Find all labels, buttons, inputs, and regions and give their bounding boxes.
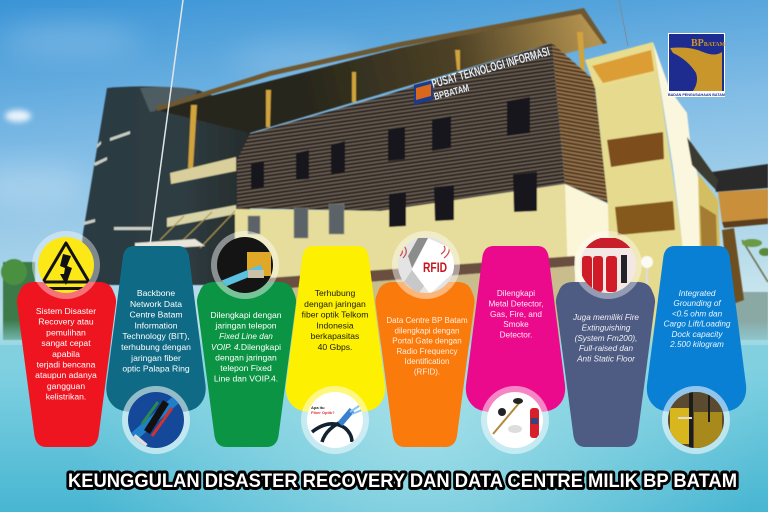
icon: fiber optic: Fiber Optik? <box>311 410 335 415</box>
logo: BP Batam <box>668 33 726 97</box>
clouds <box>0 24 370 205</box>
icon: high voltage <box>32 231 100 299</box>
text: Dock capacity <box>672 330 723 339</box>
text: ataupun adanya <box>35 370 97 380</box>
text: Smoke <box>503 320 529 329</box>
text: Full-raised dan <box>579 344 634 353</box>
text: Recovery atau <box>38 317 94 327</box>
text: Data Centre BP Batam <box>386 316 468 325</box>
text: terhubung dengan <box>121 342 191 352</box>
icon: cargo lift <box>662 386 730 454</box>
text: Portal Gate dengan <box>392 337 462 346</box>
text: Information <box>134 320 178 330</box>
text: VOIP. 4.Dilengkapi <box>211 342 281 352</box>
text: apabila <box>52 349 80 359</box>
louvre facade <box>237 43 565 211</box>
icon: fiber cables <box>122 386 190 454</box>
dark tower <box>78 86 250 285</box>
antennas <box>150 0 628 245</box>
text: Anti Static Floor <box>576 355 635 364</box>
text: Metal Detector, <box>488 299 544 308</box>
roof edge <box>155 8 607 111</box>
light pole <box>641 256 653 268</box>
text: Dilengkapi dengan <box>210 310 282 320</box>
louvre side <box>552 43 608 203</box>
icon: RFID cube: RFID <box>423 259 447 275</box>
text: Dilengkapi <box>497 289 535 298</box>
sign: Pusat Teknologi Informasi: PUSAT TEKNOLOGI INFORMASI <box>430 44 551 91</box>
text: Gas, Fire, and <box>490 310 542 319</box>
text: dilengkapi dengan <box>395 326 459 335</box>
icon: network cable <box>211 231 279 299</box>
text: Extinguishing <box>582 323 631 332</box>
text: Network Data <box>130 299 182 309</box>
icon: fire cylinders <box>574 231 642 299</box>
building <box>78 8 768 345</box>
text: terjadi bencana <box>37 360 96 370</box>
text: Terhubung <box>315 288 356 298</box>
balconies <box>170 157 236 184</box>
roof soffit <box>155 10 607 133</box>
panel: teal backbone network <box>106 246 206 454</box>
background sky <box>0 0 768 345</box>
text: jaringan fiber <box>130 353 181 363</box>
text: Identification <box>405 357 449 366</box>
text: (RFID). <box>414 368 440 376</box>
panel: orange RFID <box>375 231 475 447</box>
logo: BP Batam: BPBATAM <box>691 38 726 49</box>
text: sangat cepat <box>41 338 91 348</box>
text: fiber optik Telkom <box>302 310 368 320</box>
walkway <box>712 164 768 192</box>
stair tower <box>595 73 685 345</box>
background trees <box>1 239 768 340</box>
bright end wall <box>565 184 612 345</box>
text: Fixed Line dan <box>219 332 273 341</box>
title: KEUNGGULAN DISASTER RECOVERY DAN DATA CENTRE MILIK BP BATAM <box>68 470 737 492</box>
panel: yellow fiber optic <box>286 246 385 454</box>
lower windows <box>248 204 344 238</box>
ground floor band <box>240 256 575 292</box>
icon: fiber optic <box>301 386 369 454</box>
text: Backbone <box>137 288 175 298</box>
icon: fiber optic: Apa itu <box>311 405 325 410</box>
icon: RFID cube <box>392 231 460 299</box>
text: Radio Frequency <box>397 347 457 356</box>
text: pemulihan <box>46 327 86 337</box>
panel: red disaster recovery <box>17 231 116 447</box>
sign: Pusat Teknologi Informasi: BPBATAM <box>433 83 471 103</box>
text: berkapasitas <box>311 331 359 341</box>
text: Juga memiliki Fire <box>572 313 639 322</box>
text: jaringan telepon <box>214 321 277 331</box>
text: Integrated <box>679 289 716 298</box>
text: (System Fm200), <box>575 334 637 343</box>
cream wall <box>235 184 572 345</box>
text: <0.5 ohm dan <box>672 309 723 318</box>
text: optic Palapa Ring <box>122 364 190 374</box>
text: Indonesia <box>316 320 354 330</box>
facade windows <box>251 97 537 227</box>
text: dengan jaringan <box>215 352 277 362</box>
text: gangguan <box>47 381 85 391</box>
text: dengan jaringan <box>304 299 366 309</box>
text: 40 Gbps. <box>318 342 352 352</box>
text: Detector. <box>500 331 532 340</box>
bottom teal background <box>0 320 768 512</box>
text: 2.500 kilogram <box>669 340 724 349</box>
text: Technology (BIT), <box>122 331 190 341</box>
roof columns <box>188 105 197 168</box>
text: telepon Fixed <box>220 363 272 373</box>
panel: green telephone network <box>197 231 296 447</box>
text: Sistem Disaster <box>36 306 96 316</box>
text: Grounding of <box>673 299 721 308</box>
text: Cargo Lift/Loading <box>664 320 731 329</box>
sign: Pusat Teknologi Informasi <box>414 44 551 105</box>
panel: pink detectors <box>466 246 565 454</box>
text: kelistrikan. <box>46 392 86 402</box>
logo: BP Batam: BADAN PENGUSAHAAN BATAM <box>668 93 725 97</box>
panel: slate fire extinguishing <box>556 231 655 447</box>
text: Centre Batam <box>129 310 183 320</box>
icon: metal detector and extinguisher <box>481 386 549 454</box>
text: Line dan VOIP.4. <box>214 374 278 384</box>
panel: blue grounding <box>647 246 746 454</box>
